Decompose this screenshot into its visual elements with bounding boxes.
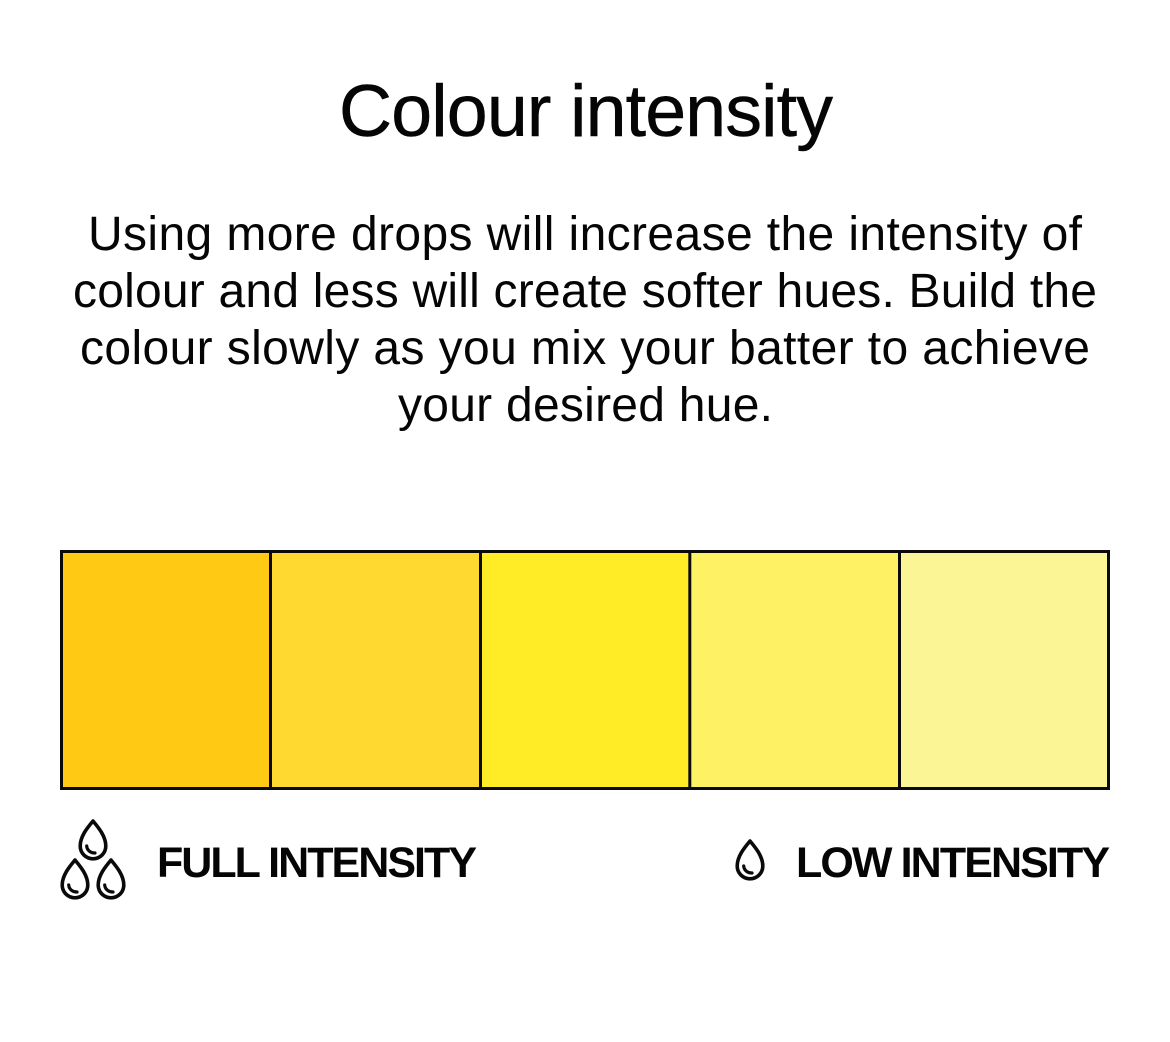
swatch: soft intensity [690, 550, 900, 790]
label: full intensity: FULL INTENSITY [157, 839, 477, 887]
colour swatch scale [60, 550, 1110, 790]
icon: single drop [737, 841, 763, 879]
label: low intensity: LOW INTENSITY [796, 839, 1110, 887]
title: Colour intensity [339, 69, 833, 152]
intro text block: Using more drops will increase the intensity of [88, 208, 1083, 261]
intro text block [73, 208, 1097, 432]
intro text block: colour slowly as you mix your batter to achieve [80, 322, 1090, 375]
swatch: full intensity [60, 550, 270, 790]
icon: three drops [62, 821, 124, 898]
intro text block: your desired hue. [398, 379, 773, 432]
swatch: high intensity [270, 550, 480, 790]
swatch: medium intensity [480, 550, 690, 790]
swatch: low intensity [900, 550, 1110, 790]
intro text block: colour and less will create softer hues. Build the [73, 265, 1097, 318]
